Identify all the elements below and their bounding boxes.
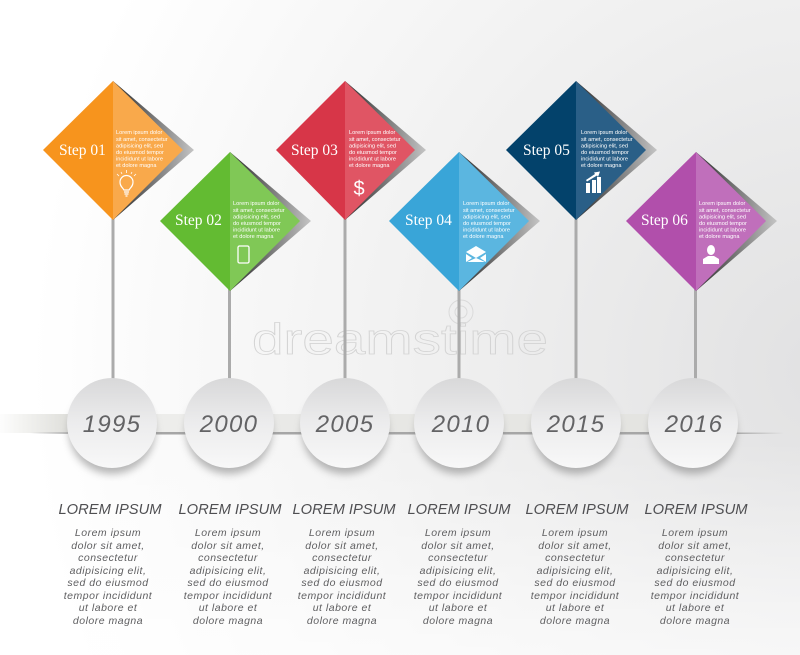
column 2 text: consectetur: [198, 552, 258, 564]
disc 1995: [67, 378, 157, 468]
column 1 text: [58, 501, 162, 627]
column 6 text: [644, 501, 748, 627]
stems: [112, 218, 697, 380]
column 4 text: LOREM IPSUM: [408, 501, 511, 518]
column 6 text: dolore magna: [660, 615, 730, 627]
column 3 text: ut labore et: [313, 602, 372, 614]
step 02 text: [233, 201, 285, 240]
column 6 text: dolor sit amet,: [658, 540, 732, 552]
column 5 text: LOREM IPSUM: [526, 501, 629, 518]
step 06 diamond: [626, 152, 777, 291]
column 3 text: tempor incididunt: [298, 590, 387, 602]
icon: dollar: $: [353, 178, 365, 200]
step 01 text: do eiusmod tempor: [116, 150, 164, 156]
column 4 text: consectetur: [428, 552, 488, 564]
disc 2005: [300, 378, 390, 468]
column 3 text: adipisicing elit,: [304, 565, 380, 577]
step 03 text: [349, 130, 401, 169]
step 03 text: Lorem ipsum dolor: [349, 130, 395, 136]
step 04 text: [463, 201, 515, 240]
step 03 text: et dolore magna: [349, 163, 390, 169]
icon: tablet: [238, 246, 249, 263]
step 01 text: sit amet, consectetur: [116, 137, 168, 143]
column 6 text: adipisicing elit,: [657, 565, 733, 577]
column 1 text: consectetur: [78, 552, 138, 564]
icon: light bulb: [117, 170, 136, 196]
step 06 text: sit amet, consectetur: [699, 208, 751, 214]
step 04 text: Lorem ipsum dolor: [463, 201, 509, 207]
column 2 text: adipisicing elit,: [190, 565, 266, 577]
disc 2000: [184, 378, 274, 468]
column 5 text: Lorem ipsum: [542, 527, 608, 539]
column 4 text: dolor sit amet,: [421, 540, 495, 552]
column 3 text: consectetur: [312, 552, 372, 564]
step 05 text: do eiusmod tempor: [581, 150, 629, 156]
step 02 text: et dolore magna: [233, 234, 274, 240]
column 4 text: ut labore et: [429, 602, 488, 614]
step 04 text: et dolore magna: [463, 234, 504, 240]
step 03 text: incididunt ut labore: [349, 156, 396, 162]
column 5 text: adipisicing elit,: [537, 565, 613, 577]
step 05 text: adipisicing elit, sed: [581, 144, 628, 150]
disc 2015: [531, 378, 621, 468]
step 05 text: Lorem ipsum dolor: [581, 130, 627, 136]
column 4 text: adipisicing elit,: [420, 565, 496, 577]
column 1 text: tempor incididunt: [64, 590, 153, 602]
column 2 text: ut labore et: [199, 602, 258, 614]
step 06 text: adipisicing elit, sed: [699, 214, 746, 220]
column 5 text: [526, 501, 629, 627]
column 1 text: adipisicing elit,: [70, 565, 146, 577]
step 06 text: et dolore magna: [699, 234, 740, 240]
watermark: [252, 300, 548, 364]
column 4 text: tempor incididunt: [414, 590, 503, 602]
step 05 text: [581, 130, 633, 169]
step 01 text: Lorem ipsum dolor: [116, 130, 162, 136]
column 5 text: dolor sit amet,: [538, 540, 612, 552]
step 06 text: do eiusmod tempor: [699, 221, 747, 227]
column 2 text: dolor sit amet,: [191, 540, 265, 552]
step 05 text: et dolore magna: [581, 163, 622, 169]
disc 2010: [414, 378, 504, 468]
column 5 text: consectetur: [545, 552, 605, 564]
column 6 text: LOREM IPSUM: [644, 501, 748, 518]
watermark: dreamstime: [252, 315, 548, 364]
icon: growth chart: [586, 172, 601, 193]
column 3 text: dolor sit amet,: [305, 540, 379, 552]
step 03 text: adipisicing elit, sed: [349, 144, 396, 150]
step 01 text: [116, 130, 168, 169]
step 02 text: incididunt ut labore: [233, 228, 280, 234]
column 4 text: sed do eiusmod: [417, 577, 499, 589]
disc 2016: 2016: [664, 411, 723, 438]
column 1 text: dolore magna: [73, 615, 143, 627]
step 06 text: Lorem ipsum dolor: [699, 201, 745, 207]
disc 2016: [648, 378, 738, 468]
disc shadows: [69, 388, 736, 474]
step 03 diamond: [276, 81, 426, 220]
step 05 label: Step 05: [523, 142, 570, 159]
step 04 text: incididunt ut labore: [463, 228, 510, 234]
step 06 text: incididunt ut labore: [699, 228, 746, 234]
step 04 text: adipisicing elit, sed: [463, 214, 510, 220]
step 06 text: [699, 201, 751, 240]
column 4 text: Lorem ipsum: [425, 527, 491, 539]
column 1 text: ut labore et: [79, 602, 138, 614]
step 02 label: Step 02: [175, 212, 222, 229]
column 5 text: dolore magna: [540, 615, 610, 627]
column 6 text: tempor incididunt: [651, 590, 740, 602]
column 2 text: tempor incididunt: [184, 590, 273, 602]
step 06 label: Step 06: [641, 212, 688, 229]
step 02 text: adipisicing elit, sed: [233, 214, 280, 220]
icon: person: [703, 245, 719, 264]
column 3 text: LOREM IPSUM: [292, 501, 396, 518]
column 2 text: sed do eiusmod: [187, 577, 269, 589]
step 02 text: do eiusmod tempor: [233, 221, 281, 227]
column 3 text: sed do eiusmod: [301, 577, 383, 589]
column 1 text: sed do eiusmod: [67, 577, 149, 589]
column 1 text: Lorem ipsum: [75, 527, 141, 539]
column 6 text: Lorem ipsum: [662, 527, 728, 539]
disc 2005: 2005: [315, 411, 374, 438]
step 02 diamond: [160, 152, 311, 291]
step 01 diamond: [43, 81, 194, 220]
column 2 text: LOREM IPSUM: [178, 501, 282, 518]
column 3 text: [292, 501, 396, 627]
column 3 text: Lorem ipsum: [309, 527, 375, 539]
step 03 text: do eiusmod tempor: [349, 150, 397, 156]
disc 2015: 2015: [546, 411, 605, 438]
column 2 text: dolore magna: [193, 615, 263, 627]
step 02 text: Lorem ipsum dolor: [233, 201, 279, 207]
column 4 text: dolore magna: [423, 615, 493, 627]
column 2 text: [178, 501, 282, 627]
column 6 text: consectetur: [665, 552, 725, 564]
step 04 diamond: [389, 152, 540, 291]
step 05 diamond: [506, 81, 657, 220]
step 03 text: sit amet, consectetur: [349, 137, 401, 143]
column 3 text: dolore magna: [307, 615, 377, 627]
step 04 text: sit amet, consectetur: [463, 208, 515, 214]
step 02 text: sit amet, consectetur: [233, 208, 285, 214]
column 5 text: ut labore et: [546, 602, 605, 614]
step 01 text: incididunt ut labore: [116, 156, 163, 162]
step 05 text: incididunt ut labore: [581, 156, 628, 162]
step 03 label: Step 03: [291, 142, 338, 159]
column 1 text: LOREM IPSUM: [58, 501, 162, 518]
column 2 text: Lorem ipsum: [195, 527, 261, 539]
disc 2010: 2010: [431, 411, 490, 438]
column 6 text: sed do eiusmod: [654, 577, 736, 589]
column 4 text: [408, 501, 511, 627]
disc 2000: 2000: [199, 411, 258, 438]
column 6 text: ut labore et: [666, 602, 725, 614]
icon: envelope: [466, 246, 486, 262]
column 5 text: tempor incididunt: [531, 590, 620, 602]
step 01 text: adipisicing elit, sed: [116, 144, 163, 150]
step 05 text: sit amet, consectetur: [581, 137, 633, 143]
step 01 label: Step 01: [59, 142, 106, 159]
step 01 text: et dolore magna: [116, 163, 157, 169]
disc 1995: 1995: [83, 411, 141, 438]
column 5 text: sed do eiusmod: [534, 577, 616, 589]
step 04 text: do eiusmod tempor: [463, 221, 511, 227]
step 04 label: Step 04: [405, 212, 452, 229]
timeline bar: [0, 414, 784, 434]
column 1 text: dolor sit amet,: [71, 540, 145, 552]
